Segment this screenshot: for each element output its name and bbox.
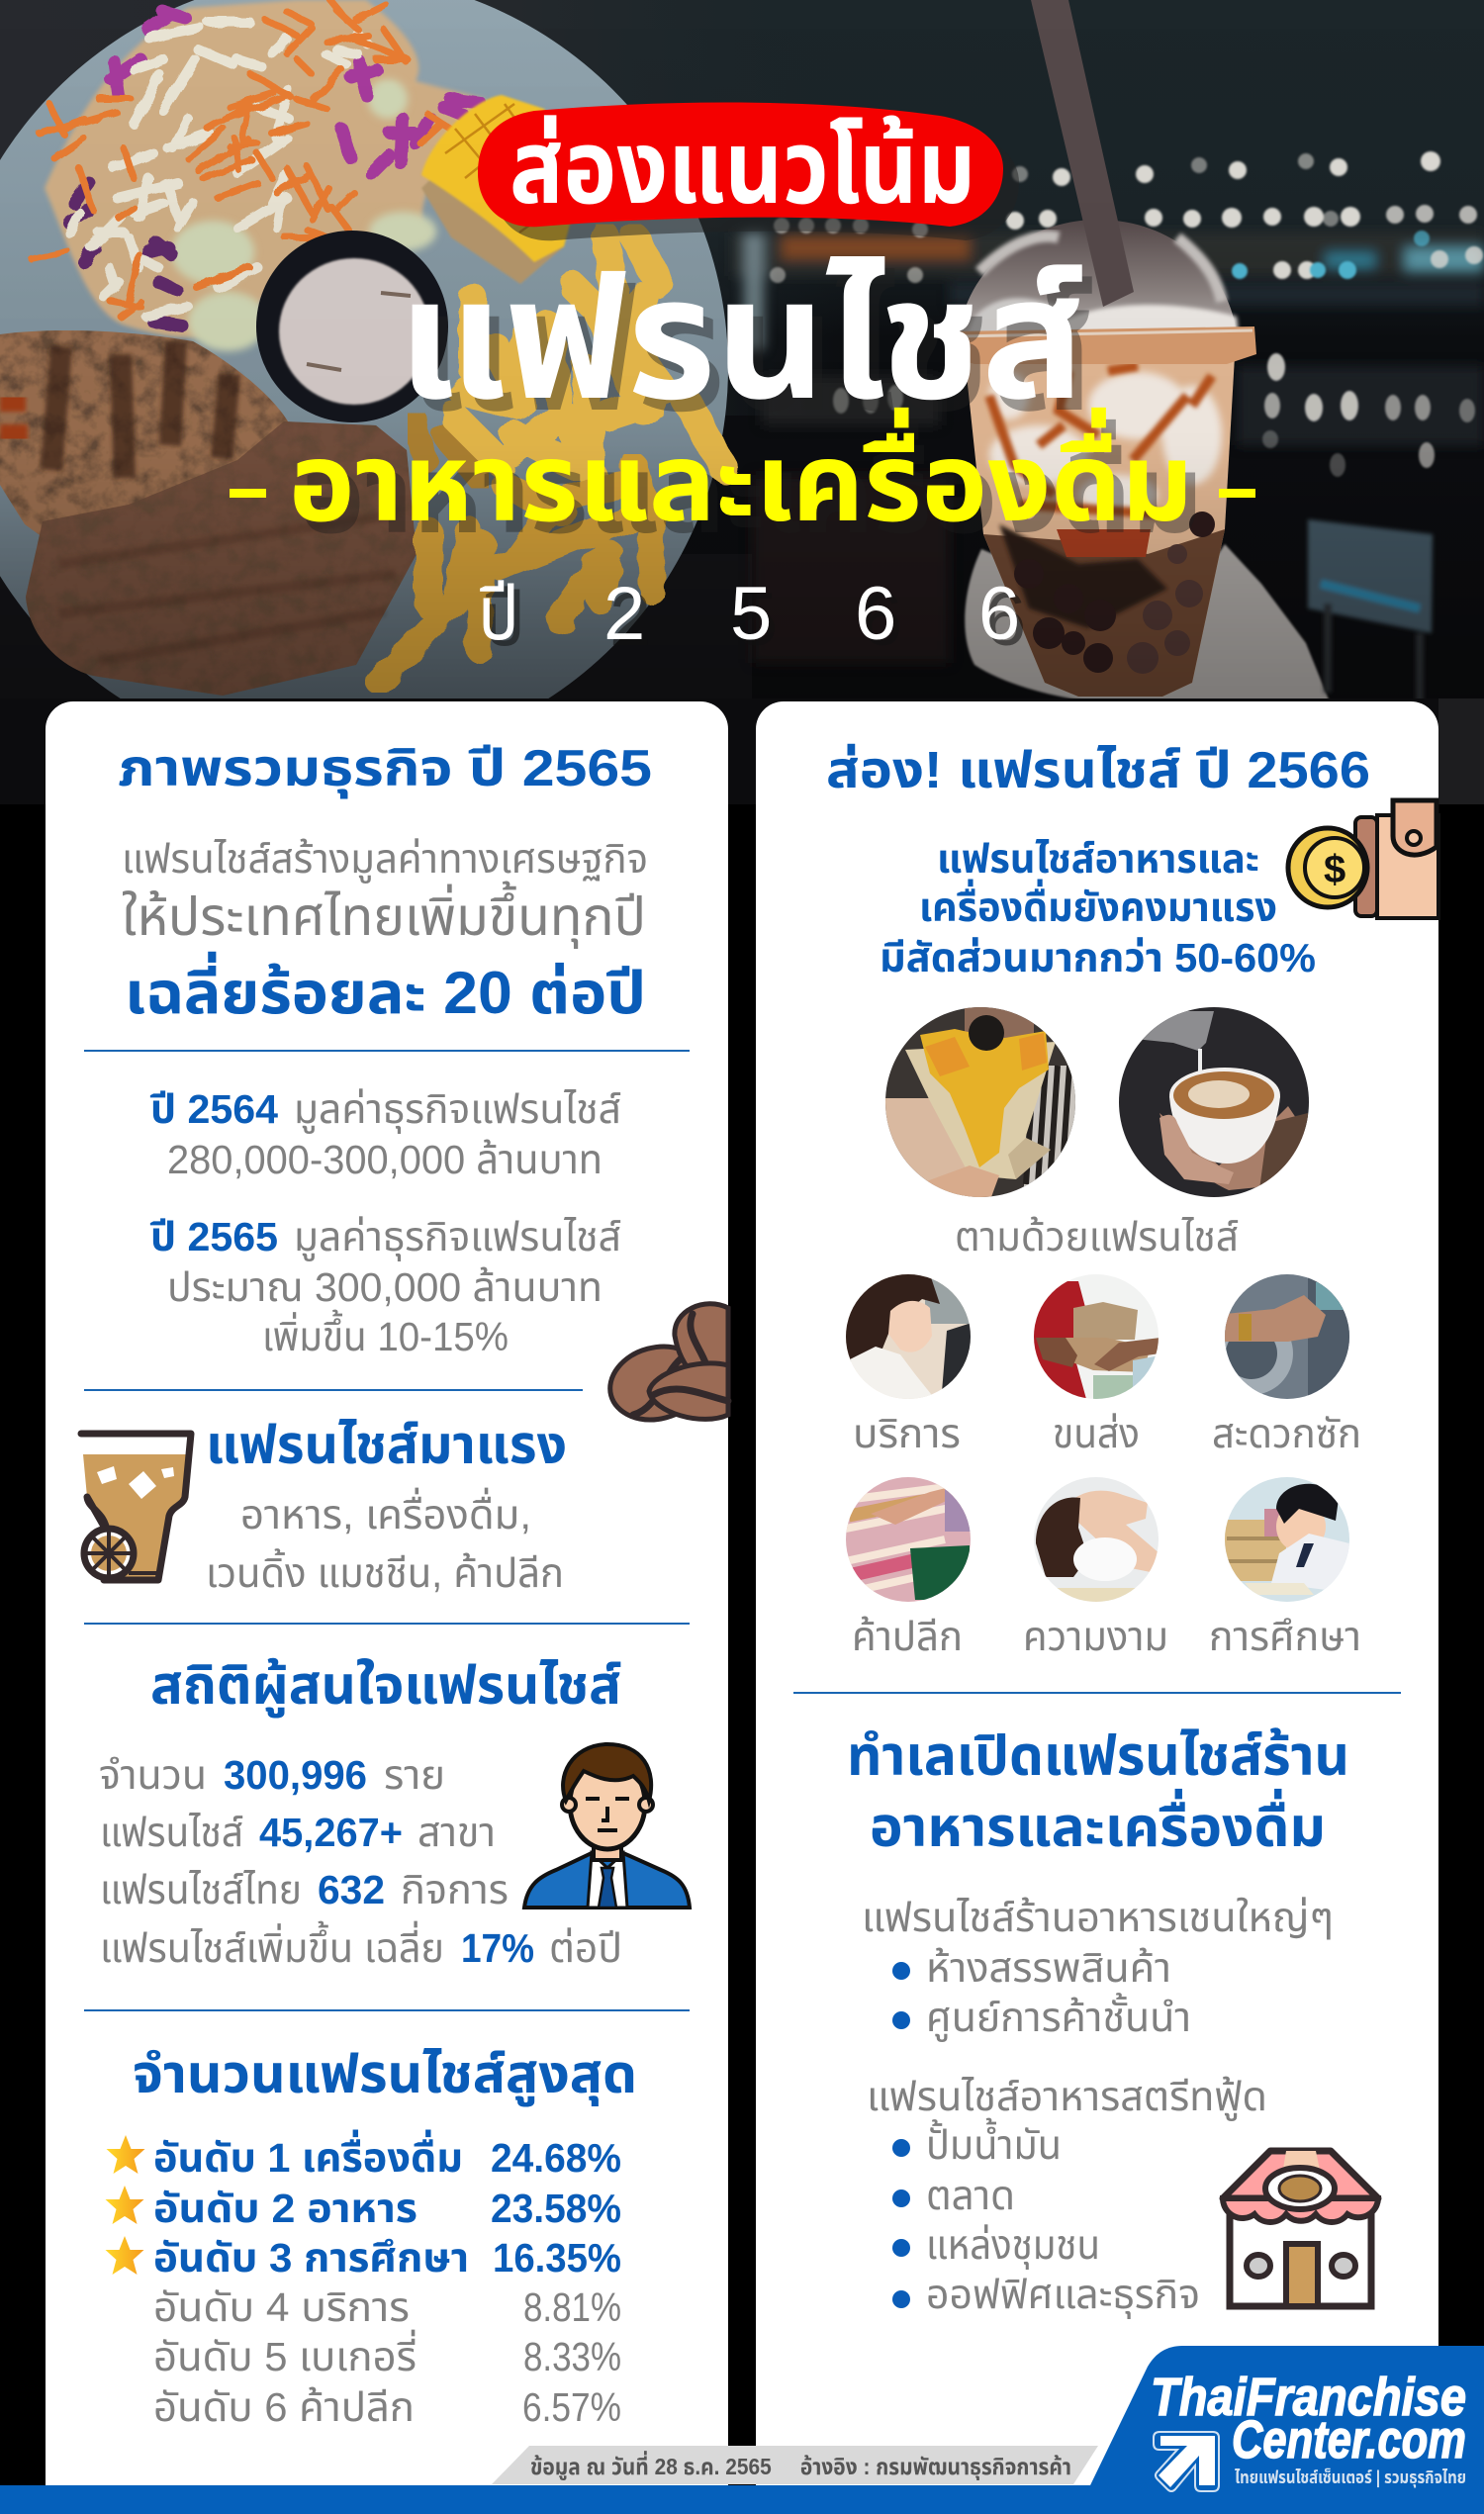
title: food and beverage: อาหารและเครื่องดื่ม (299, 419, 1203, 556)
labels: franchise categories: ค้าปลีก (852, 1614, 963, 1659)
icon: coffee beans (602, 1304, 728, 1430)
title: red badge: ส่องแนวโน้ม (510, 111, 975, 226)
heading: top franchise types: จำนวนแฟรนไชส์สูงสุด (133, 2045, 637, 2106)
text block: food and beverage share (880, 836, 1316, 980)
photo: service (846, 1274, 972, 1399)
heading: business overview: ภาพรวมธุรกิจ ปี 2565 (118, 740, 652, 798)
photo: latte (1118, 1007, 1310, 1199)
footer: blue band (0, 2485, 1484, 2514)
labels: franchise categories: ความงาม (1023, 1614, 1168, 1659)
heading: locations: ทำเลเปิดแฟรนไชส์ร้าน (847, 1724, 1349, 1787)
text block: 2564 and 2565 values: ปี 2565 (149, 1214, 278, 1259)
text block: economic value: เฉลี่ยร้อยละ 20 ต่อปี (125, 951, 646, 1026)
dipping sauce cup (256, 231, 448, 422)
title: year 2566: 6 (855, 572, 896, 656)
text block: statistics: 632 (318, 1867, 385, 1912)
ranking list: อันดับ 4 บริการ (153, 2284, 410, 2330)
panel: right card (0, 701, 1484, 2514)
text block: statistics: กิจการ (401, 1867, 509, 1912)
icon: star rank 2 (105, 2186, 144, 2224)
ranking list: อันดับ 5 เบเกอรี่ (153, 2329, 417, 2379)
panel: left card (46, 701, 728, 2485)
photo: cheese fries (885, 1007, 1075, 1197)
labels: franchise categories: บริการ (853, 1411, 961, 1456)
text block: economic value: แฟรนไชส์สร้างมูลค่าทางเศรษฐกิจ (122, 836, 648, 884)
list: chain restaurants (862, 1895, 1334, 2042)
distant sign (1308, 519, 1433, 704)
icon: star rank 3 (105, 2236, 144, 2275)
text block: 2564 and 2565 values: เพิ่มขึ้น 10-15% (262, 1309, 509, 1359)
straw (1031, 0, 1134, 307)
title: year 2566: 6 (984, 578, 1026, 662)
title: year 2566: 5 (736, 578, 778, 662)
photo: beauty (1034, 1477, 1160, 1602)
title: year 2566: ปี (484, 578, 525, 662)
text block: statistics: จำนวน (99, 1752, 207, 1798)
title: franchise: แฟรนไชส์ (398, 244, 1084, 434)
ranking list: 24.68% (491, 2135, 621, 2181)
cup body (965, 356, 1235, 697)
icon: coffee shop (1223, 2151, 1378, 2306)
plate (0, 0, 728, 762)
list: street food: แฟรนไชส์อาหารสตรีทฟู้ด (867, 2074, 1267, 2121)
photo: delivery (1034, 1274, 1160, 1399)
text block: statistics: 45,267+ (259, 1810, 403, 1855)
list: street food: ออฟฟิศและธุรกิจ (926, 2272, 1200, 2319)
title: year 2566: 5 (730, 572, 772, 656)
list: street food (867, 2074, 1267, 2319)
icon: hand with coin (1288, 800, 1438, 918)
french fries (379, 236, 724, 682)
footer: source strip: ข้อมูล ณ วันที่ 28 ธ.ค. 2565 อ้างอิง : กรมพัฒนาธุรกิจการค้า (530, 2451, 1071, 2480)
text block: statistics (99, 1752, 622, 1971)
list: street food: แหล่งชุมชน (926, 2222, 1100, 2270)
ranking list: 8.33% (523, 2334, 621, 2379)
icon: hand with coin: $ (1324, 848, 1345, 891)
labels: franchise categories: การศึกษา (1209, 1614, 1361, 1659)
text block: statistics: แฟรนไชส์ไทย (100, 1867, 302, 1912)
title: year 2566 (478, 572, 1026, 662)
text block: economic value: ให้ประเทศไทยเพิ่มขึ้นทุกปี (122, 881, 646, 949)
logo: ThaiFranchise Center (1076, 2346, 1484, 2514)
ranking list: 16.35% (493, 2235, 621, 2281)
labels: franchise categories: ขนส่ง (1053, 1411, 1140, 1456)
text block: statistics: 17% (461, 1925, 534, 1971)
list: chain restaurants: ศูนย์การค้าชั้นนำ (926, 1992, 1191, 2042)
title: year 2566: 6 (978, 572, 1020, 656)
ranking list: อันดับ 6 ค้าปลีก (153, 2384, 415, 2430)
title: year 2566: 2 (609, 578, 651, 662)
hero photo: food plate and bubble tea (0, 0, 1484, 804)
text block: hot categories (206, 1487, 564, 1596)
heading: franchise 2566: ส่อง! แฟรนไชส์ ปี 2566 (826, 742, 1370, 799)
text block: statistics: สาขา (417, 1810, 496, 1855)
photo: education (1225, 1477, 1349, 1602)
text block: 2564 and 2565 values: ประมาณ 300,000 ล้านบาท (167, 1264, 603, 1310)
lid rim (954, 326, 1256, 364)
ranking list: อันดับ 3 การศึกษา (153, 2235, 469, 2281)
ranking list: 8.81% (523, 2284, 621, 2330)
text block: hot categories: เวนดิ้ง แมชชีน, ค้าปลีก (206, 1547, 564, 1596)
text block: statistics: ต่อปี (549, 1925, 622, 1971)
grilled chicken (0, 330, 417, 696)
text block: statistics: แฟรนไชส์เพิ่มขึ้น เฉลี่ย (100, 1920, 444, 1971)
hand (965, 544, 1331, 704)
text block: 2564 and 2565 values (149, 1086, 621, 1359)
photo: laundry (1225, 1274, 1349, 1399)
list: street food: ตลาด (926, 2173, 1015, 2218)
corn (421, 95, 584, 284)
text block: food and beverage share: แฟรนไชส์อาหารและ (937, 836, 1259, 882)
photo: retail (846, 1477, 971, 1602)
text block: statistics: ราย (384, 1752, 445, 1798)
ranking list: อันดับ 2 อาหาร (153, 2186, 417, 2231)
text block: 2564 and 2565 values: ปี 2564 (149, 1086, 278, 1132)
title: year 2566: 2 (603, 572, 645, 656)
heading: interest stats: สถิติผู้สนใจแฟรนไชส์ (150, 1656, 621, 1718)
heading: locations (847, 1724, 1349, 1858)
ranking list: 23.58% (491, 2186, 621, 2231)
lid dome (958, 220, 1237, 341)
icon: logo arrow (1154, 2432, 1219, 2491)
text block: statistics: 300,996 (224, 1752, 367, 1798)
title: year 2566: 6 (861, 578, 902, 662)
heading: locations: อาหารและเครื่องดื่ม (870, 1788, 1326, 1858)
list: chain restaurants: แฟรนไชส์ร้านอาหารเชนใหญ่ๆ (862, 1895, 1334, 1940)
ranking list (105, 2129, 621, 2430)
text block: 2564 and 2565 values: 280,000-300,000 ล้านบาท (167, 1137, 603, 1182)
bubble tea cup (954, 0, 1331, 704)
text block: food and beverage share: มีสัดส่วนมากกว่า 50-60% (880, 935, 1316, 980)
text block: 2564 and 2565 values: มูลค่าธุรกิจแฟรนไชส์ (294, 1214, 621, 1261)
night bokeh lights (732, 151, 1484, 663)
list: street food: ปั้มน้ำมัน (926, 2117, 1062, 2168)
icon: iced drink with citrus (81, 1434, 191, 1581)
text: followed by: ตามด้วยแฟรนไชส์ (955, 1214, 1239, 1259)
labels: franchise categories: สะดวกซัก (1212, 1411, 1361, 1456)
title: food and beverage: อาหารและเครื่องดื่ม (289, 407, 1193, 544)
salad (32, 0, 485, 351)
title: franchise: แฟรนไชส์ (408, 256, 1094, 446)
title: year 2566: ปี (478, 572, 519, 656)
icon: businessman (524, 1744, 690, 1908)
labels: franchise categories (852, 1411, 1361, 1659)
text block: economic value (122, 836, 648, 1026)
icon: star rank 1 (107, 2135, 144, 2174)
ranking list: 6.57% (522, 2384, 621, 2430)
text block: food and beverage share: เครื่องดื่มยังคงมาแรง (919, 879, 1277, 930)
text block: statistics: แฟรนไชส์ (100, 1810, 243, 1855)
footer: source strip (492, 2446, 1098, 2484)
heading: hot franchises: แฟรนไชส์มาแรง (206, 1416, 567, 1475)
text block: hot categories: อาหาร, เครื่องดื่ม, (240, 1487, 531, 1537)
ranking list: อันดับ 1 เครื่องดื่ม (153, 2129, 463, 2181)
text block: 2564 and 2565 values: มูลค่าธุรกิจแฟรนไชส์ (294, 1086, 621, 1134)
list: chain restaurants: ห้างสรรพสินค้า (926, 1945, 1171, 1991)
